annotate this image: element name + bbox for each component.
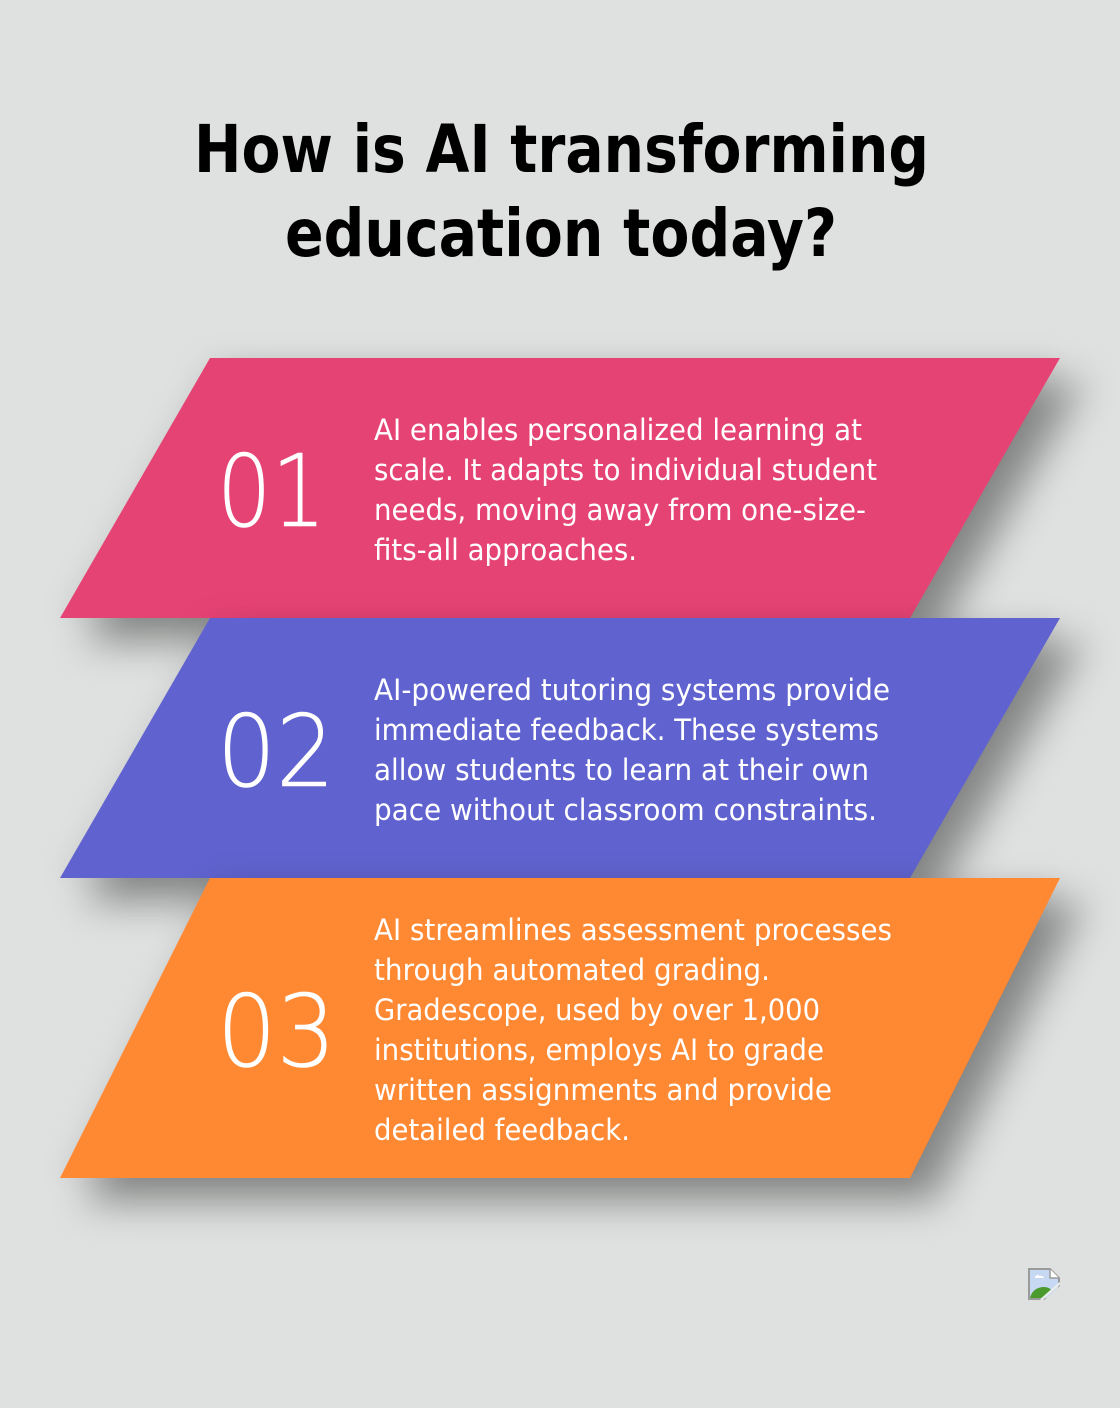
panel: step 02: [60, 618, 1060, 878]
text: step 03: institutions, employs AI to grade: [374, 1033, 824, 1067]
text: step 01: scale. It adapts to individual student: [374, 453, 877, 487]
text: step 02: allow students to learn at their own: [374, 753, 869, 787]
text: step 03: written assignments and provide: [374, 1073, 832, 1107]
text: step 03: [374, 913, 892, 1147]
panel: step 01: [60, 358, 1060, 618]
text: step 03: through automated grading.: [374, 953, 770, 987]
text: step 03: detailed feedback.: [374, 1113, 630, 1147]
panel: step 03: [60, 878, 1060, 1178]
text: step 01: AI enables personalized learning at: [374, 413, 862, 447]
text: step 02: AI-powered tutoring systems provide: [374, 673, 890, 707]
title: [194, 111, 929, 272]
number 03: 03: [217, 973, 336, 1090]
text: step 01: fits-all approaches.: [374, 533, 637, 567]
title: education today?: [285, 195, 837, 272]
text: step 03: Gradescope, used by over 1,000: [374, 993, 820, 1027]
text: step 01: needs, moving away from one-size-: [374, 493, 866, 527]
text: step 02: [374, 673, 890, 827]
number 01: 01: [217, 433, 326, 550]
title: How is AI transforming: [194, 111, 929, 188]
text: step 02: pace without classroom constraints.: [374, 793, 877, 827]
parallelogram: orange: [60, 878, 1060, 1178]
parallelogram: pink: [60, 358, 1060, 618]
text: step 02: immediate feedback. These systems: [374, 713, 879, 747]
parallelogram: blue: [60, 618, 1060, 878]
text: step 01: [374, 413, 877, 567]
text: step 03: AI streamlines assessment processes: [374, 913, 892, 947]
icon: broken image: [1029, 1269, 1061, 1301]
number 02: 02: [217, 693, 335, 810]
